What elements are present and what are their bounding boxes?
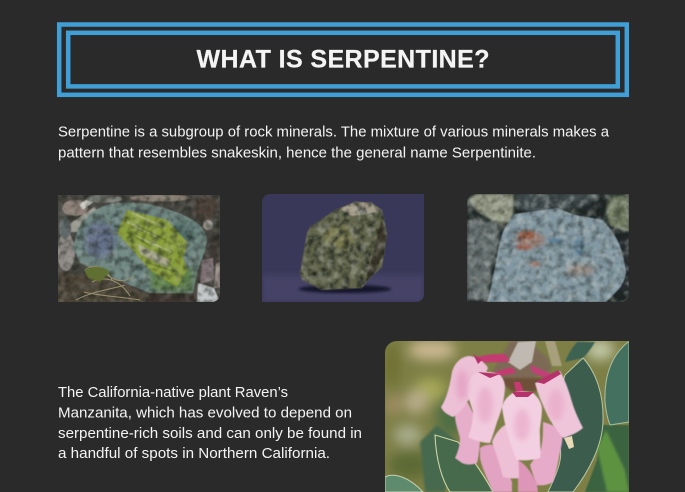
- bell: bottom left: [480, 445, 512, 492]
- bell: lower centre: [492, 425, 519, 478]
- bell: right: [535, 371, 583, 438]
- grass tuft: [76, 266, 140, 300]
- boulder: [73, 203, 207, 293]
- flower stem: [492, 341, 552, 378]
- caption text: [58, 384, 362, 462]
- intro text: Serpentine is a subgroup of rock minerals. The mixture of various minerals makes a: [58, 124, 610, 140]
- caption text: a handful of spots in Northern California.: [58, 445, 330, 462]
- heading: WHAT IS SERPENTINE?: [196, 46, 490, 74]
- intro text: pattern that resembles snakeskin, hence the general name Serpentinite.: [58, 144, 536, 162]
- intro text: [58, 124, 610, 162]
- caption text: serpentine-rich soils and can only be found in: [58, 425, 362, 442]
- bell: upper left: [441, 356, 488, 417]
- photo: green serpentine boulder among stones: [57, 194, 220, 302]
- photo: Raven's Manzanita pink flowers: [384, 340, 629, 492]
- bell: front centre: [502, 392, 542, 460]
- inner blue border: [68, 33, 618, 86]
- bell: lower right: [530, 422, 562, 485]
- photo: blue-grey rock with rust patches: [467, 194, 629, 302]
- blurred background bokeh: [384, 340, 614, 479]
- photo: dark speckled rock on purple backdrop: [262, 194, 424, 302]
- caption text: The California-native plant Raven’s: [58, 384, 288, 401]
- main rock: [487, 208, 626, 302]
- bell: front left: [467, 372, 505, 443]
- bell: lower left: [455, 399, 480, 464]
- flower bells: [441, 356, 583, 492]
- leaves: [565, 342, 595, 362]
- title banner: [59, 24, 627, 95]
- outer blue border: [59, 24, 627, 95]
- rock: [300, 202, 387, 290]
- green mineral patch: [117, 210, 188, 287]
- bell: bottom centre: [518, 460, 538, 492]
- caption text: Manzanita, which has evolved to depend on: [58, 404, 352, 422]
